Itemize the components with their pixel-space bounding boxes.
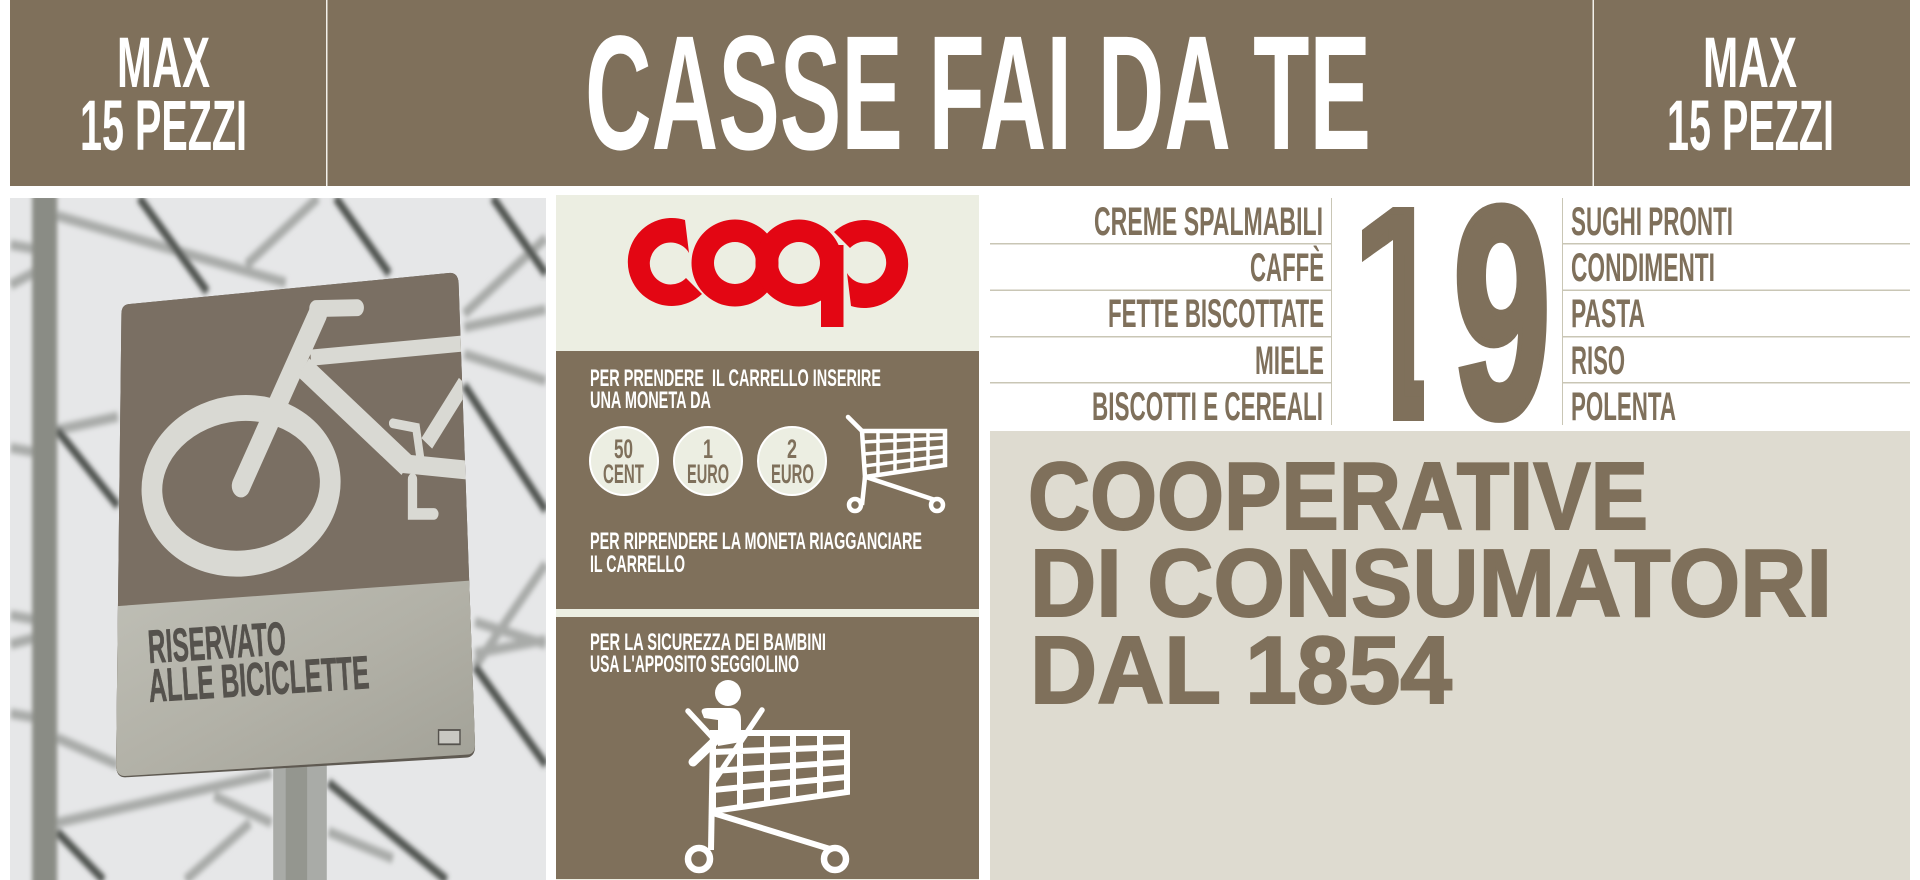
- right product names: RISO: [1571, 339, 1625, 383]
- left label: max 15 pezzi: 15 PEZZI: [80, 87, 247, 166]
- sticker: [439, 730, 460, 744]
- instruction text: child safety: [590, 629, 826, 678]
- instruction text: insert coin: UNA MONETA DA: [590, 387, 711, 414]
- coin: 2 euro: [758, 427, 826, 495]
- claim text: [1028, 443, 1832, 724]
- sign text: [148, 622, 370, 702]
- claim text: COOPERATIVE: [1028, 443, 1648, 550]
- photo: bicycle parking sign: [10, 193, 546, 880]
- big number 19: 9: [1453, 144, 1551, 480]
- coin: 1 euro: [674, 427, 742, 495]
- right product names: [1571, 200, 1733, 429]
- right product names: PASTA: [1571, 292, 1645, 336]
- icon: shopping cart: [848, 417, 945, 511]
- right product names: CONDIMENTI: [1571, 246, 1715, 290]
- left product names: [1092, 200, 1324, 429]
- right product names: SUGHI PRONTI: [1571, 200, 1733, 244]
- coin: 50 cent: [590, 427, 658, 495]
- instruction text: retrieve coin: PER RIPRENDERE LA MONETA RIAGGANCIARE: [590, 528, 922, 555]
- coin: 50 cent: CENT: [603, 459, 644, 489]
- left product names: CREME SPALMABILI: [1094, 200, 1323, 244]
- claim text: DI CONSUMATORI: [1030, 530, 1832, 637]
- panel: cooperative claim: [990, 431, 1910, 880]
- claim text: DAL 1854: [1030, 617, 1452, 724]
- instruction text: child safety: USA L'APPOSITO SEGGIOLINO: [590, 651, 799, 678]
- right label: max 15 pezzi: MAX: [1703, 24, 1797, 103]
- icon: child in shopping cart: [688, 680, 847, 870]
- coin: 2 euro: 2: [787, 434, 797, 464]
- left product names: MIELE: [1255, 339, 1324, 383]
- coop logo: [628, 218, 908, 327]
- left label: max 15 pezzi: [80, 24, 247, 166]
- panel: product list: [990, 198, 1910, 425]
- right product names: POLENTA: [1571, 385, 1676, 429]
- big number 19: 1: [1340, 139, 1444, 486]
- sign text: ALLE BICICLETTE: [147, 645, 371, 712]
- left product names: FETTE BISCOTTATE: [1108, 292, 1324, 336]
- instruction text: retrieve coin: IL CARRELLO: [590, 551, 685, 578]
- left label: max 15 pezzi: MAX: [117, 24, 210, 103]
- sign pole: [273, 760, 327, 880]
- sign plate: [107, 265, 482, 783]
- coin: 1 euro: 1: [703, 434, 713, 464]
- left product names: CAFFÈ: [1250, 245, 1324, 290]
- middle column: [556, 195, 979, 880]
- instruction text: insert coin: [590, 365, 881, 414]
- panel: child seat: [556, 617, 979, 879]
- coin: 1 euro: EURO: [687, 459, 729, 489]
- right label: max 15 pezzi: [1667, 24, 1834, 166]
- coin: 2 euro: EURO: [771, 459, 814, 489]
- bicycle pictogram: [148, 308, 468, 571]
- instruction text: child safety: PER LA SICUREZZA DEI BAMBINI: [590, 629, 826, 656]
- coin: 50 cent: 50: [614, 434, 633, 464]
- panel: trolley coin instructions: [556, 351, 979, 609]
- sign text: RISERVATO: [146, 611, 287, 673]
- left pole: [32, 193, 57, 880]
- header band: [10, 0, 1910, 186]
- instruction text: retrieve coin: [590, 528, 922, 578]
- instruction text: insert coin: PER PRENDERE IL CARRELLO INSERIRE: [590, 365, 881, 392]
- big number 19: [1362, 202, 1547, 423]
- left product names: BISCOTTI E CEREALI: [1092, 385, 1323, 429]
